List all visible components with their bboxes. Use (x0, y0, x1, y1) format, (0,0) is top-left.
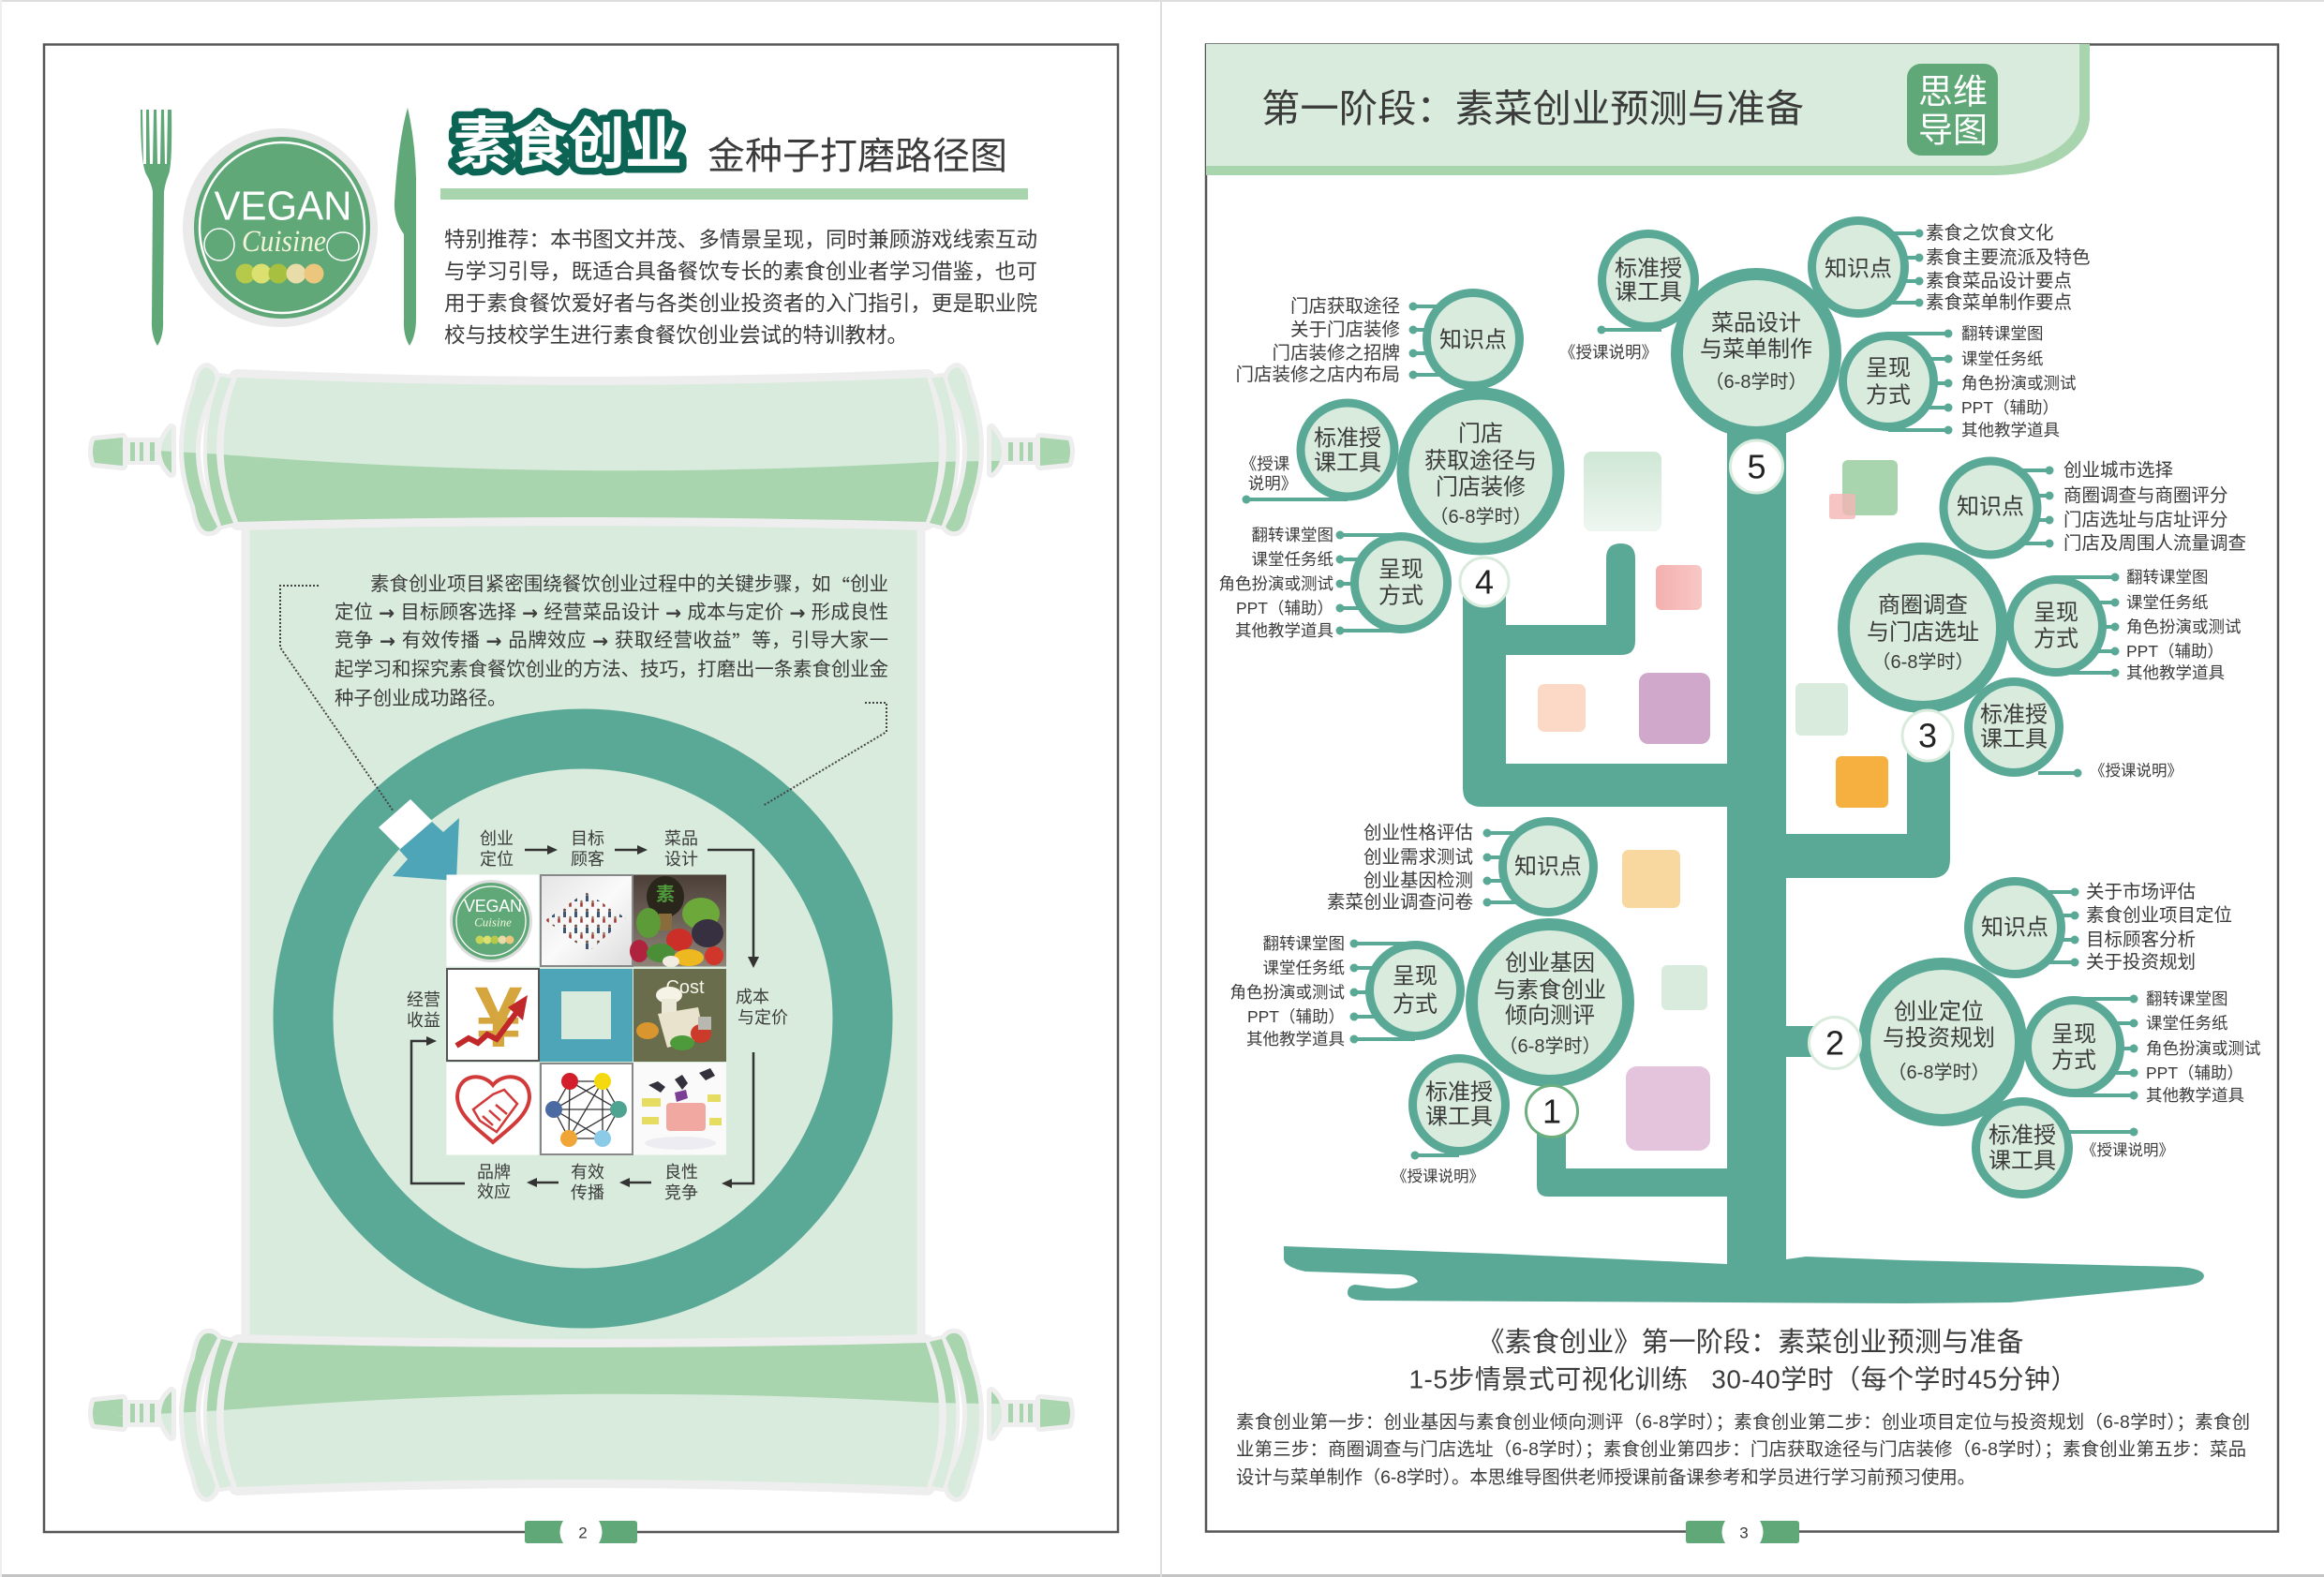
step 3 presentation list: 其他教学道具 (2126, 663, 2225, 682)
step 4 tools node (1301, 403, 1394, 497)
step 1 knowledge list: 素菜创业调查问卷 (1327, 892, 1473, 913)
step 5 tools node (1602, 234, 1694, 326)
badge: 思维导图: 思维 (1918, 73, 1988, 111)
label: 目标顾客: 顾客 (571, 850, 604, 869)
step 2 teaching note (2022, 1128, 2174, 1159)
page number: 3 (1686, 1521, 1799, 1543)
step number 3: 3 (1918, 716, 1937, 755)
step 4 main node: 获取途径与 (1424, 448, 1537, 474)
step 3 main node (1844, 549, 2002, 707)
step 2 knowledge node: 知识点 (1981, 915, 2048, 941)
step 4 knowledge node (1426, 292, 1520, 386)
page frame: right (1206, 45, 2278, 1531)
step 1 presentation list: 翻转课堂图 (1263, 934, 1345, 953)
step 1 tools node: 课工具 (1425, 1104, 1493, 1130)
step 2 presentation list: 翻转课堂图 (2146, 989, 2228, 1008)
step 5 main node (1677, 274, 1835, 433)
header band: right page (1206, 44, 2090, 175)
flow labels and arrows (407, 829, 788, 1202)
step 1 main node: 倾向测评 (1505, 1003, 1595, 1029)
step 4 knowledge list: 关于门店装修 (1290, 320, 1400, 340)
step 1 presentation list: 其他教学道具 (1246, 1030, 1345, 1049)
step 5 presentation list: 课堂任务纸 (1961, 350, 2043, 368)
step 2 main node: 与投资规划 (1883, 1025, 1995, 1051)
cell: centre blue block (540, 969, 633, 1062)
heading: 第一阶段: 第一阶段：素菜创业预测与准备 (1261, 87, 1804, 130)
heading: 素食创业: 素食创业 (454, 112, 682, 176)
step 4 knowledge node: 知识点 (1439, 328, 1507, 352)
arrow (708, 850, 759, 968)
text block: project introduction: 种子创业成功路径。 (335, 688, 507, 709)
caption subheading: 1-5步情景式可视化训练 30-40学时（每个学时45分钟） (1409, 1364, 2077, 1394)
step 5 knowledge node (1812, 221, 1904, 313)
step 3 tools node: 课工具 (1980, 727, 2048, 751)
label: 经营收益 (407, 990, 440, 1030)
step 4 knowledge list: 门店装修之招牌 (1272, 343, 1400, 364)
text block: step summary: 业第三步：商圈调查与门店选址（6-8学时）；素食创业第四步：门店获取途径与门店装修（6-8学时）；素食创业第五步：菜品 (1236, 1439, 2246, 1460)
step 3 teaching note: 《授课说明》 (2090, 762, 2182, 780)
step 2 knowledge list: 关于市场评估 (2086, 882, 2196, 902)
step 2 presentation node (2028, 1001, 2120, 1093)
image grid (446, 875, 726, 1154)
label: 菜品设计 (664, 829, 698, 869)
step 1 knowledge list: 创业需求测试 (1363, 847, 1473, 868)
step 4 tools node: 课工具 (1314, 450, 1381, 476)
step 1 teaching note: 《授课说明》 (1392, 1168, 1484, 1185)
label: 菜品设计: 设计 (664, 850, 698, 869)
label: 良性竞争: 良性 (664, 1163, 698, 1182)
dotted leader left (280, 586, 394, 811)
step 3 knowledge list (1990, 460, 2246, 554)
arrow (411, 1036, 465, 1183)
caption heading: 《素食创业》第一阶段：素菜创业预测与准备 (1477, 1327, 2024, 1358)
text block: special recommendation (444, 229, 1037, 347)
label: 创业定位 (480, 829, 514, 869)
cell: vegetables and bulb (630, 875, 726, 967)
step 4 presentation list: 其他教学道具 (1235, 621, 1333, 640)
step 5 tools node: 课工具 (1615, 279, 1682, 305)
step 5 presentation node: 方式 (1866, 382, 1911, 409)
step 5 main node: 与菜单制作 (1700, 337, 1812, 362)
text block: special recommendation: 用于素食餐饮爱好者与各类创业投资者的入门指引，更是职业院 (444, 292, 1037, 315)
step 2 presentation list: 角色扮演或测试 (2146, 1039, 2260, 1058)
cell: crowd (541, 875, 633, 966)
arrow (527, 1178, 559, 1187)
step 4 knowledge list: 门店装修之店内布局 (1235, 364, 1400, 385)
step 3 knowledge node: 知识点 (1957, 495, 2024, 519)
step 2 knowledge list: 目标顾客分析 (2086, 930, 2196, 950)
dotted leader right (763, 703, 886, 806)
step 5 presentation list: 其他教学道具 (1961, 421, 2060, 439)
step 3 presentation list: PPT（辅助） (2126, 642, 2224, 661)
label: 经营收益: 收益 (407, 1011, 440, 1030)
cell: vegan logo (446, 875, 539, 967)
step 3 tools node: 标准授 (1980, 703, 2048, 727)
step 1 knowledge list (1327, 823, 1548, 913)
step 2 main node: （6-8学时） (1888, 1062, 1989, 1083)
logo: vegan cuisine plate: VEGAN (214, 184, 352, 229)
text block: project introduction: 定位 → 目标顾客选择 → 经营菜品设计 → 成本与定价 → 形成良性 (335, 602, 888, 624)
step 1 presentation node (1370, 945, 1460, 1036)
step 4 presentation node (1355, 536, 1447, 630)
step 2 tools node (1975, 1102, 2069, 1194)
arrow (619, 1178, 651, 1187)
step 5 knowledge list: 素食主要流派及特色 (1926, 247, 2091, 268)
scroll: bottom roller (93, 1333, 1070, 1497)
step 4 knowledge list (1235, 296, 1473, 385)
step 5 knowledge list: 素食菜品设计要点 (1926, 271, 2072, 291)
text block: special recommendation: 校与技校学生进行素食餐饮创业尝试的特训教材。 (444, 324, 908, 347)
text block: project introduction (335, 571, 888, 709)
step 4 presentation list: PPT（辅助） (1236, 599, 1333, 617)
label: 品牌效应 (477, 1163, 511, 1201)
step 2 teaching note: 《授课说明》 (2081, 1141, 2174, 1159)
step number 2 (1809, 1018, 1861, 1068)
badge: 思维导图 (1907, 64, 1998, 156)
step 4 presentation list (1218, 526, 1401, 640)
step 4 presentation node: 方式 (1378, 583, 1423, 609)
step 4 presentation list: 角色扮演或测试 (1218, 574, 1333, 593)
step number 1: 1 (1542, 1093, 1561, 1130)
step 3 main node: 与门店选址 (1867, 620, 1979, 645)
page number: 3: 3 (1739, 1524, 1749, 1542)
step 4 teaching note (1241, 454, 1348, 504)
cell: yen profit (447, 969, 539, 1065)
step 3 knowledge list: 商圈调查与商圈评分 (2063, 485, 2228, 506)
step 2 tools node: 标准授 (1989, 1123, 2056, 1149)
label: 菜品设计: 菜品 (664, 829, 698, 848)
step number 4: 4 (1475, 562, 1494, 602)
step 1 knowledge node: 知识点 (1514, 855, 1582, 879)
step 1 presentation list: 课堂任务纸 (1263, 959, 1345, 977)
step 2 presentation list (2074, 989, 2260, 1105)
step 4 presentation list: 课堂任务纸 (1252, 550, 1333, 569)
step 5 knowledge list: 素食之饮食文化 (1926, 223, 2054, 244)
cell: yen profit: ¥ (474, 970, 523, 1065)
step 5 knowledge node: 知识点 (1825, 257, 1892, 281)
step 3 main node: （6-8学时） (1872, 651, 1974, 673)
step 4 tools node: 标准授 (1314, 425, 1381, 452)
step 4 teaching note: 《授课 (1241, 454, 1290, 473)
step 5 teaching note: 《授课说明》 (1559, 343, 1658, 362)
step 2 main node (1865, 963, 2020, 1121)
step number 3 (1902, 710, 1953, 761)
step 4 presentation list: 翻转课堂图 (1252, 526, 1333, 544)
cell: network (541, 1064, 633, 1154)
label: 品牌效应: 效应 (477, 1183, 511, 1201)
step 1 main node: 与素食创业 (1494, 978, 1606, 1003)
step number 5: 5 (1747, 448, 1766, 485)
icon: knife (395, 108, 416, 346)
decorative colour squares (1538, 452, 1898, 1151)
step 5 main node: 菜品设计 (1711, 311, 1801, 335)
step 3 presentation node (2009, 579, 2103, 673)
label: 有效传播 (571, 1163, 604, 1202)
step 3 knowledge list: 门店及周围人流量调查 (2063, 533, 2246, 554)
step 1 main node: 创业基因 (1505, 950, 1595, 976)
step 1 presentation node: 呈现 (1393, 963, 1438, 989)
logo: vegan cuisine plate (183, 128, 378, 327)
label: 目标顾客 (571, 829, 604, 869)
step 5 presentation list (1888, 324, 2077, 439)
panel: scroll paper (246, 506, 921, 1349)
logo: vegan cuisine plate: Cuisine (242, 225, 326, 259)
step 5 presentation list: 角色扮演或测试 (1961, 374, 2077, 393)
label: 成本与定价: 成本 (736, 988, 769, 1006)
step 1 tools node: 标准授 (1425, 1079, 1493, 1106)
label: 成本与定价: 与定价 (737, 1008, 788, 1027)
step 5 main node: （6-8学时） (1706, 371, 1807, 393)
step 2 presentation list: 其他教学道具 (2146, 1086, 2244, 1105)
text block: step summary: 设计与菜单制作（6-8学时）。本思维导图供老师授课前备课参考和学员进行学习前预习使用。 (1236, 1467, 1975, 1488)
step 3 presentation list (2056, 568, 2242, 682)
page number: 2 (525, 1521, 637, 1543)
step 5 presentation node: 呈现 (1866, 356, 1911, 380)
step 4 main node (1403, 394, 1558, 549)
step 4 main node: 门店 (1458, 422, 1503, 446)
arrow (615, 845, 648, 855)
step 1 presentation list (1229, 934, 1415, 1049)
step 3 main node: 商圈调查 (1878, 592, 1968, 618)
step 2 knowledge node (1968, 881, 2062, 974)
step 2 presentation list: 课堂任务纸 (2146, 1014, 2228, 1033)
step 1 main node (1471, 924, 1629, 1081)
label: 良性竞争: 竞争 (664, 1183, 698, 1202)
tree: trunk, branches and ground (1284, 412, 2204, 1303)
text block: project introduction: 竞争 → 有效传播 → 品牌效应 → 获取经营收益”等，引导大家一 (335, 627, 888, 655)
label: 目标顾客: 目标 (571, 829, 604, 848)
step 2 knowledge list (2015, 882, 2232, 973)
cell: competition (633, 1063, 726, 1154)
step 1 knowledge node (1503, 821, 1593, 913)
cell: handshake heart (446, 1063, 539, 1154)
cell: vegan logo: VEGAN (464, 897, 522, 915)
step 3 presentation list: 角色扮演或测试 (2126, 617, 2242, 636)
step 2 knowledge list: 关于投资规划 (2086, 952, 2196, 973)
arrow (525, 845, 558, 855)
text block: step summary: 素食创业第一步：创业基因与素食创业倾向测评（6-8学时）；素食创业第二步：创业项目定位与投资规划（6-8学时）；素食创 (1236, 1412, 2250, 1433)
step 3 tools node (1968, 682, 2060, 772)
step 3 knowledge list: 创业城市选择 (2063, 460, 2173, 481)
step 5 knowledge list (1858, 223, 2091, 313)
page frame: left (44, 45, 1118, 1532)
subheading: 金种子打磨路径图: 金种子打磨路径图 (708, 136, 1007, 177)
label: 创业定位: 定位 (480, 850, 514, 869)
text block: special recommendation: 特别推荐：本书图文并茂、多情景呈现，同时兼顾游戏线索互动 (444, 229, 1037, 251)
label: 有效传播: 有效 (571, 1163, 604, 1182)
cell: vegan logo: Cuisine (474, 915, 512, 930)
step 1 main node: （6-8学时） (1499, 1035, 1601, 1057)
label: 品牌效应: 品牌 (477, 1163, 511, 1182)
step 1 knowledge list: 创业基因检测 (1363, 870, 1473, 891)
step 5 presentation list: 翻转课堂图 (1961, 324, 2043, 343)
cell: cost (633, 969, 726, 1062)
label: 经营收益: 经营 (407, 990, 440, 1009)
step 5 knowledge list: 素食菜单制作要点 (1926, 292, 2072, 313)
step 2 presentation node: 方式 (2051, 1048, 2096, 1074)
step 4 presentation node: 呈现 (1378, 557, 1423, 583)
step 4 knowledge list: 门店获取途径 (1290, 296, 1400, 317)
step 4 teaching note: 说明》 (1248, 474, 1297, 493)
label: 创业定位: 创业 (480, 829, 514, 848)
text block: special recommendation: 与学习引导，既适合具备餐饮专长的素食创业者学习借鉴，也可 (444, 260, 1037, 283)
step 3 teaching note (2038, 762, 2182, 780)
cell: vegetables and bulb: 素 (656, 884, 675, 905)
step 5 teaching note (1559, 326, 1661, 362)
cell: cost: Cost (665, 977, 705, 998)
step 1 tools node (1413, 1059, 1505, 1151)
arrow: pointer into grid (379, 799, 459, 881)
step 2 presentation list: PPT（辅助） (2146, 1064, 2243, 1082)
step 4 main node: 门店装修 (1436, 474, 1526, 500)
arrow (722, 1052, 753, 1188)
step number 4 (1460, 558, 1509, 606)
label: 有效传播: 传播 (571, 1183, 604, 1202)
label: 成本与定价 (736, 988, 788, 1027)
step 3 knowledge node (1944, 461, 2037, 555)
step 1 presentation node: 方式 (1393, 991, 1438, 1018)
icon: fork (141, 110, 171, 346)
step 2 tools node: 课工具 (1989, 1149, 2056, 1173)
step 1 presentation list: 角色扮演或测试 (1229, 983, 1345, 1002)
ring (304, 738, 862, 1299)
step 4 main node: （6-8学时） (1430, 506, 1531, 528)
heading underline (440, 188, 1028, 200)
text block: step summary (1236, 1412, 2250, 1488)
step 3 knowledge list: 门店选址与店址评分 (2063, 510, 2228, 530)
step number 1 (1526, 1085, 1578, 1138)
step 5 presentation node (1842, 335, 1934, 427)
text block: project introduction: 起学习和探究素食餐饮创业的方法、技巧，打磨出一条素食创业金 (335, 659, 888, 680)
step 3 presentation list: 课堂任务纸 (2126, 593, 2208, 612)
step 2 knowledge list: 素食创业项目定位 (2086, 905, 2232, 926)
step 1 knowledge list: 创业性格评估 (1363, 823, 1473, 843)
step 3 presentation list: 翻转课堂图 (2126, 568, 2208, 587)
label: 良性竞争 (664, 1163, 698, 1202)
step 5 presentation list: PPT（辅助） (1961, 398, 2059, 417)
step 5 tools node: 标准授 (1615, 257, 1682, 281)
text block: project introduction: 素食创业项目紧密围绕餐饮创业过程中的关键步骤，如“创业 (370, 571, 888, 599)
step 2 presentation node: 呈现 (2051, 1021, 2096, 1048)
step number 5 (1730, 440, 1782, 493)
step 1 teaching note (1392, 1151, 1484, 1185)
step 3 presentation node: 方式 (2034, 626, 2078, 652)
step number 2: 2 (1825, 1023, 1844, 1063)
step 2 main node: 创业定位 (1894, 999, 1984, 1025)
step 1 presentation list: PPT（辅助） (1247, 1007, 1345, 1026)
scroll: top roller (93, 367, 1070, 531)
page number: 2: 2 (578, 1524, 588, 1542)
step 3 presentation node: 呈现 (2034, 600, 2078, 626)
badge: 思维导图: 导图 (1918, 111, 1988, 150)
